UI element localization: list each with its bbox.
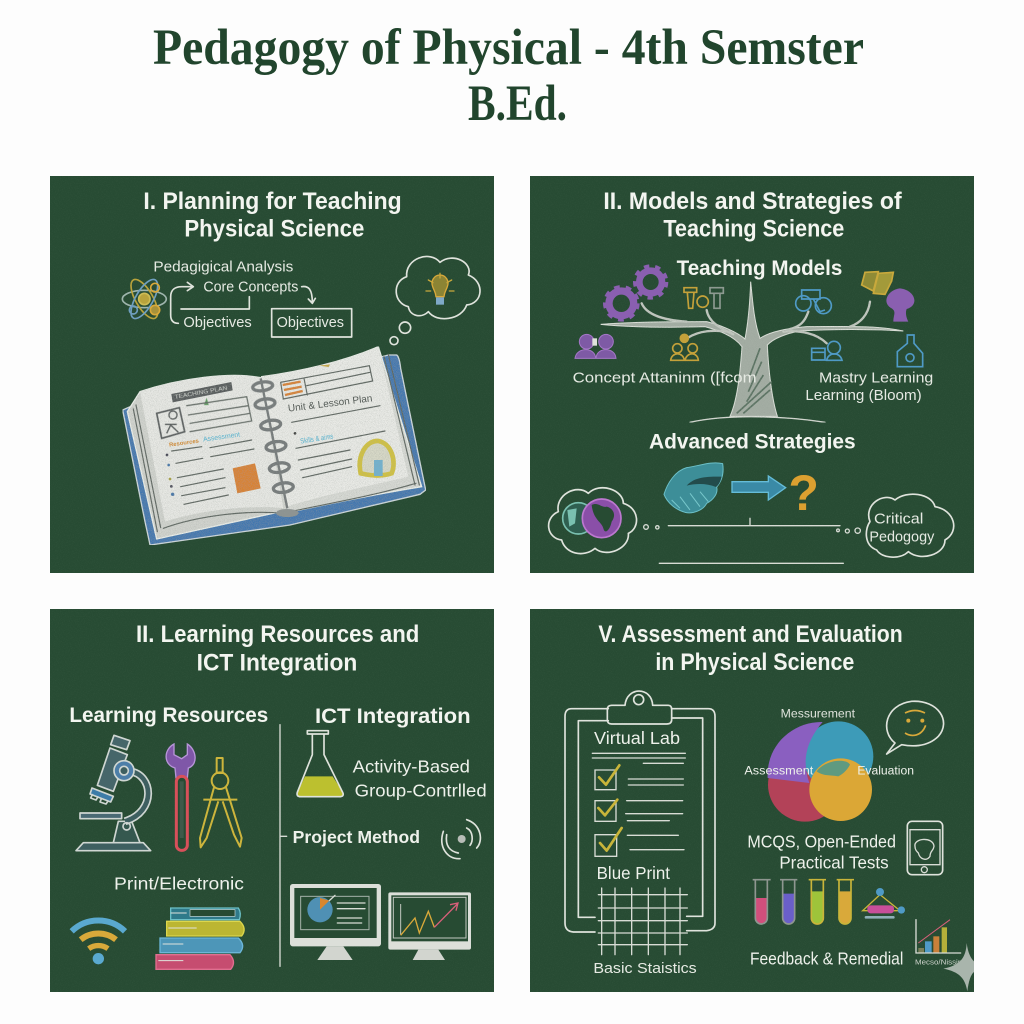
icon: clipboard [565, 691, 715, 932]
venn labels: Messurement [781, 706, 856, 720]
label: project method: Project Method [293, 827, 420, 847]
chart: venn diagram [744, 706, 914, 822]
illustration: open lesson-plan book [123, 347, 426, 545]
icon: wrench [166, 744, 195, 850]
book left page details: Resources [169, 439, 199, 449]
book left page details [157, 382, 261, 504]
blueprint grid: Blue Print [597, 863, 670, 883]
title: B.Ed. [468, 76, 567, 132]
icon: signal [442, 820, 480, 859]
icon: microscope [76, 735, 151, 851]
concept flow: Pedagigical Analysis [153, 260, 293, 276]
speech bubble with smile [887, 701, 944, 754]
icon: monitor with pie chart [290, 884, 381, 960]
heading: models: Teaching Science [663, 216, 844, 243]
illustration: chalk tree [601, 282, 903, 422]
icon: team figures yellow [684, 288, 723, 308]
label: feedback and remedial: Feedback & Remedial [750, 949, 903, 969]
labels: models [573, 370, 933, 404]
label: print electronic: Print/Electronic [114, 874, 244, 894]
heading: planning [143, 188, 402, 243]
heading: resources: ICT Integration [197, 650, 357, 677]
panel: assessment and evaluation [530, 609, 974, 992]
heading: resources: II. Learning Resources and [136, 621, 419, 648]
heading: assessment: V. Assessment and Evaluation [598, 621, 903, 648]
icon: blue learner [812, 341, 842, 360]
subheading: ICT integration: ICT Integration [315, 704, 471, 728]
icon: smartphone [907, 821, 943, 875]
book right page details: Unit & Lesson Plan [287, 393, 373, 415]
cloud: critical pedagogy: Critical [874, 511, 923, 527]
heading: planning: Physical Science [184, 216, 364, 243]
label: activity based: Group-Contrlled [355, 780, 487, 800]
panel: models and strategies [530, 176, 974, 573]
concept flow [153, 260, 352, 337]
heading: planning: I. Planning for Teaching [143, 188, 402, 215]
icon: molecule apparatus [863, 888, 905, 917]
icon: flask [297, 731, 343, 797]
concept flow: Objectives [277, 315, 344, 331]
heading: models: II. Models and Strategies of [603, 188, 903, 215]
icon: yellow pair [671, 334, 698, 360]
icon: bar chart [915, 920, 967, 967]
checklist [592, 728, 685, 856]
icon: monitor with line chart [388, 892, 471, 960]
venn labels [744, 706, 914, 778]
icon: yellow documents and purple figure [862, 272, 914, 322]
icon: drawing compass [200, 758, 242, 847]
column divider [280, 725, 287, 966]
thought cloud with globes [549, 488, 659, 554]
label: test types: MCQS, Open-Ended [747, 831, 896, 851]
thought cloud with light bulb [390, 256, 480, 345]
icon: blue house flask [897, 335, 923, 367]
icon: handshake [664, 463, 723, 513]
cloud: critical pedagogy: Pedogogy [869, 530, 935, 546]
label: test types: Practical Tests [779, 853, 889, 873]
concept flow: Objectives [183, 315, 252, 331]
arrow [732, 476, 786, 500]
label: basic statistics: Basic Staistics [593, 961, 697, 977]
label: activity based [353, 756, 487, 800]
heading: resources [136, 621, 419, 677]
venn labels: Assessment [744, 764, 814, 778]
subheading: teaching models: Teaching Models [677, 256, 842, 280]
labels: models: Concept Attaninm ([fcom [573, 370, 757, 386]
cloud: critical pedagogy [866, 494, 954, 557]
icon: gears [605, 266, 666, 320]
icon: wifi [72, 921, 125, 964]
heading: models [603, 188, 903, 243]
panel: learning resources and ICT [50, 609, 494, 992]
icon: atom [122, 276, 166, 322]
label: test types [747, 831, 896, 873]
book left page details: Assessment [203, 432, 241, 444]
labels: models: Learning (Bloom) [805, 388, 922, 404]
heading: assessment: in Physical Science [655, 649, 854, 676]
subheading: learning resources: Learning Resources [69, 703, 268, 727]
title: Pedagogy of Physical - 4th Semster [153, 20, 864, 76]
icon: book stack [156, 908, 244, 969]
icon: test tubes [753, 880, 854, 924]
venn labels: Evaluation [857, 764, 914, 778]
blueprint grid [597, 863, 687, 955]
book right page details [281, 364, 394, 478]
labels: models: Mastry Learning [819, 370, 933, 386]
label: activity based: Activity-Based [353, 756, 470, 776]
concept flow: Core Concepts [203, 280, 298, 296]
icon: question mark: ? [788, 465, 819, 521]
icon: blue collaboration [796, 290, 831, 314]
book left page details: TEACHING PLAN [174, 386, 228, 401]
book right page details: Skills & aims [300, 431, 334, 446]
icon: purple pair [575, 334, 616, 358]
icon: bar chart: Mecso/Nissine [915, 958, 967, 967]
subheading: advanced strategies: Advanced Strategies [649, 429, 856, 453]
title [153, 20, 864, 132]
book spiral binding [252, 378, 294, 508]
panel: planning for teaching [50, 176, 494, 573]
checklist: Virtual Lab [594, 728, 680, 748]
heading: assessment [598, 621, 903, 676]
decorative sparkle star [943, 943, 974, 991]
dividers and dots [659, 518, 860, 563]
